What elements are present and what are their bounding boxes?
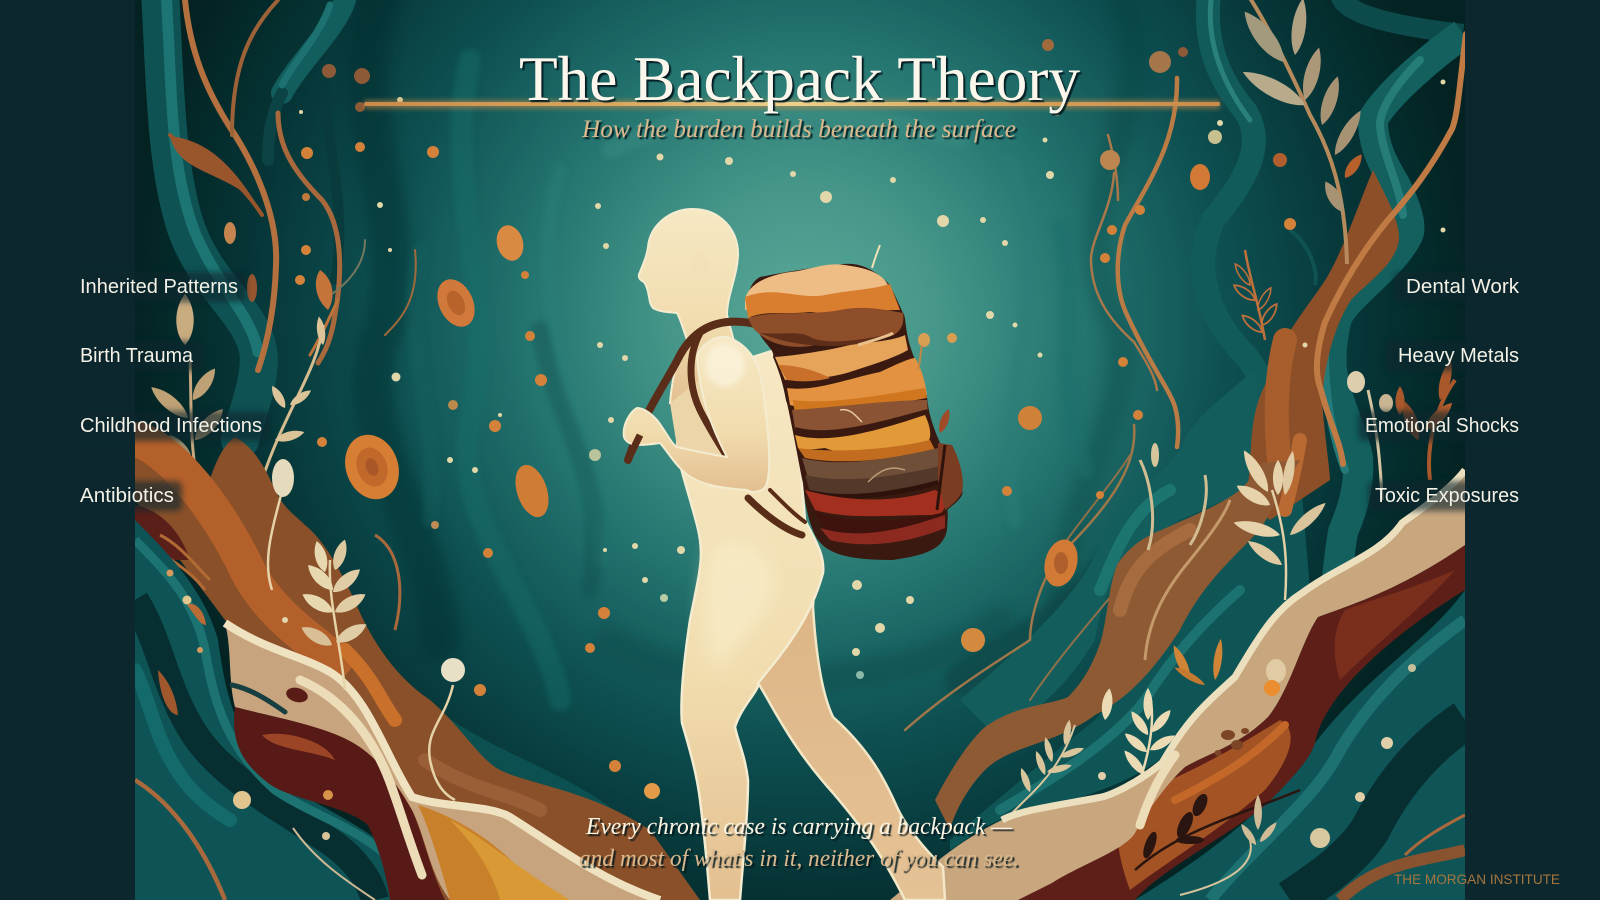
- label: emotional shocks: Emotional Shocks: [1365, 415, 1519, 437]
- right cream band and maroon: [890, 470, 1465, 900]
- right cream sprigs: [1010, 447, 1329, 815]
- right bottom teal ribbon: [1135, 590, 1465, 900]
- red layers: [805, 490, 945, 516]
- subtitle: How the burden builds beneath the surface: [581, 116, 1016, 143]
- brown layer two: [792, 400, 928, 432]
- backpack straps: [628, 322, 805, 535]
- pack silhouette: [748, 264, 962, 560]
- caption line one: Every chronic case is carrying a backpack —: [585, 814, 1013, 840]
- grey brown layers: [802, 448, 938, 480]
- scattered dots: [166, 39, 1416, 848]
- right vines: [905, 34, 1466, 730]
- title rule: [364, 100, 1220, 109]
- brown layer: [748, 308, 903, 347]
- back leg: [759, 600, 946, 900]
- chest: [670, 380, 720, 454]
- left teal ribbons: [160, 0, 345, 440]
- title: The Backpack Theory: [519, 44, 1080, 114]
- background swirls: [368, 0, 1133, 830]
- front leg and torso: [677, 350, 823, 900]
- left labels: [80, 276, 262, 507]
- right brown trunk: [1245, 170, 1399, 520]
- label: inherited patterns: Inherited Patterns: [80, 276, 238, 298]
- label backings: [74, 272, 1526, 511]
- bottom-left teal ribbon: [135, 520, 390, 900]
- left fern sprigs: [151, 294, 326, 472]
- bottom-left brown trunk: [135, 430, 700, 900]
- top cream layer: [745, 264, 890, 310]
- pack highlights: [858, 333, 893, 345]
- label: antibiotics: Antibiotics: [80, 485, 174, 507]
- bottom-left cream band and maroon: [225, 623, 660, 900]
- central figure: [639, 209, 945, 900]
- closing caption: [579, 814, 1019, 872]
- cream sprig: lower-left wheat: [268, 459, 465, 800]
- label: birth trauma: Birth Trauma: [80, 345, 194, 367]
- footer credit: THE MORGAN INSTITUTE: [1394, 871, 1560, 887]
- right brown ribbon: [935, 443, 1300, 830]
- label: childhood infections: Childhood Infections: [80, 415, 262, 437]
- side pocket: [938, 443, 963, 510]
- arm and hand: [624, 337, 769, 492]
- orange layer two: [775, 335, 908, 380]
- right teal ribbons: [1203, 0, 1463, 640]
- right outline fern and sprigs: [1232, 250, 1456, 500]
- label: toxic exposures: Toxic Exposures: [1375, 485, 1519, 507]
- pale dots: [299, 80, 1446, 679]
- backpack: [745, 245, 963, 560]
- caption line two: and most of what's in it, neither of you can see.: [579, 846, 1019, 872]
- floating discs: [336, 164, 1210, 652]
- orange layer four: [795, 415, 930, 453]
- label: dental work: Dental Work: [1406, 276, 1520, 298]
- right labels: [1365, 276, 1520, 507]
- head and neck: [639, 209, 738, 403]
- label: heavy metals: Heavy Metals: [1398, 345, 1519, 367]
- right top leaf stalk: [1237, 0, 1366, 264]
- left vines and leaf: [170, 0, 416, 370]
- orange layer three: [787, 358, 927, 407]
- right teal lumps: [950, 370, 1310, 850]
